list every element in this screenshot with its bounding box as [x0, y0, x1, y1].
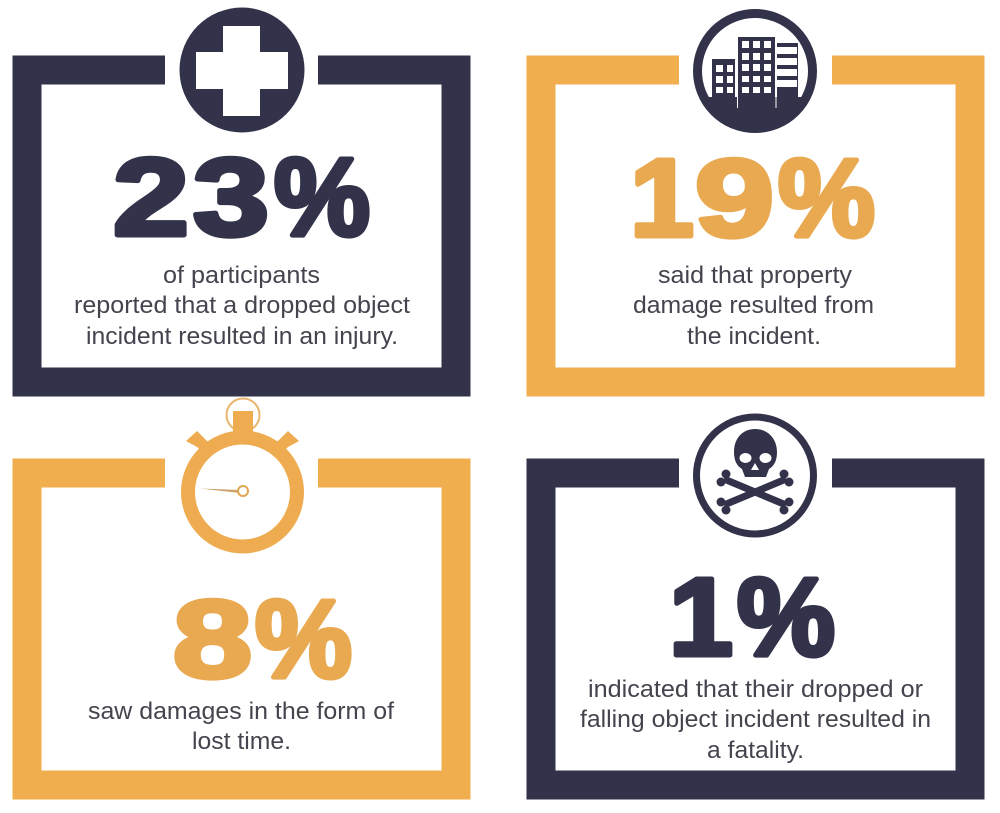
text: property damage description: said that property: [658, 262, 853, 289]
panel frame: injury: [27, 70, 456, 382]
statistic: 1%: %: [737, 556, 835, 679]
text: injury description: of participants: [163, 262, 320, 289]
text: injury description: reported that a dropped object: [74, 292, 410, 319]
text: property damage description: the incident.: [687, 323, 821, 350]
statistic: 23%: %: [274, 136, 370, 259]
statistic: 23%: 3: [193, 136, 269, 259]
icon: stopwatch: [186, 398, 299, 546]
panel frame: property damage: [541, 70, 970, 382]
statistic: 19%: %: [778, 137, 875, 260]
text: fatality description: falling object incident resulted in: [580, 706, 931, 733]
statistic: 8%: 8: [173, 578, 252, 701]
panel frame: lost time: [27, 473, 456, 785]
icon: skull and crossbones: [696, 417, 814, 534]
panel frame: fatality: [541, 473, 970, 785]
text: fatality description: a fatality.: [707, 737, 804, 764]
text: property damage description: damage resulted from: [633, 292, 874, 319]
panel: property damage: [541, 14, 970, 382]
text: lost time description: saw damages in the form of: [88, 698, 394, 725]
panel: fatality: [541, 417, 970, 785]
icon: medical cross: [180, 8, 304, 132]
statistic: 23%: 2: [113, 136, 189, 259]
panel: lost time: [27, 398, 456, 785]
text: injury description: incident resulted in an injury.: [86, 323, 398, 350]
panel: injury: [27, 8, 456, 382]
icon: city buildings: [698, 14, 812, 128]
statistic: 19%: 1: [630, 137, 694, 260]
statistic: 19%: 9: [695, 137, 774, 260]
text: lost time description: lost time.: [192, 728, 291, 755]
statistic: 1%: 1: [669, 556, 733, 679]
text: fatality description: indicated that their dropped or: [588, 676, 923, 703]
statistic: 8%: %: [255, 578, 352, 701]
